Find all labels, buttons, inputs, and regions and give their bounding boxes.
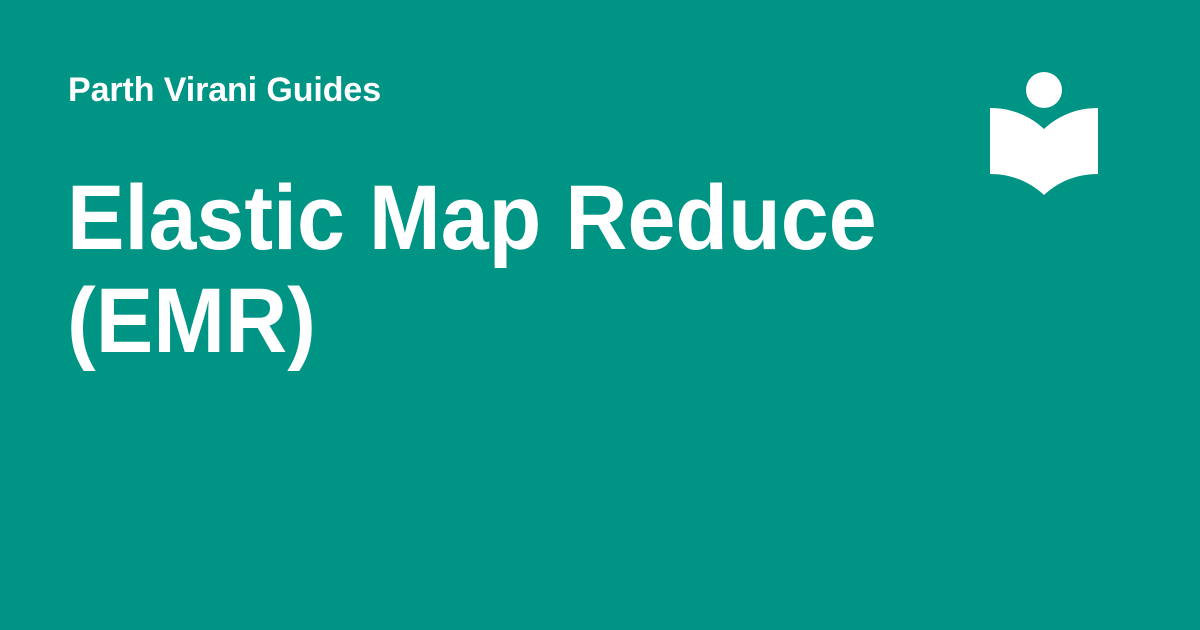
site name: Parth Virani Guides (68, 71, 381, 109)
title: Elastic Map Reduce (67, 167, 877, 269)
icon: reader with open book (990, 72, 1098, 195)
title (67, 167, 877, 372)
title: (EMR) (67, 270, 316, 372)
